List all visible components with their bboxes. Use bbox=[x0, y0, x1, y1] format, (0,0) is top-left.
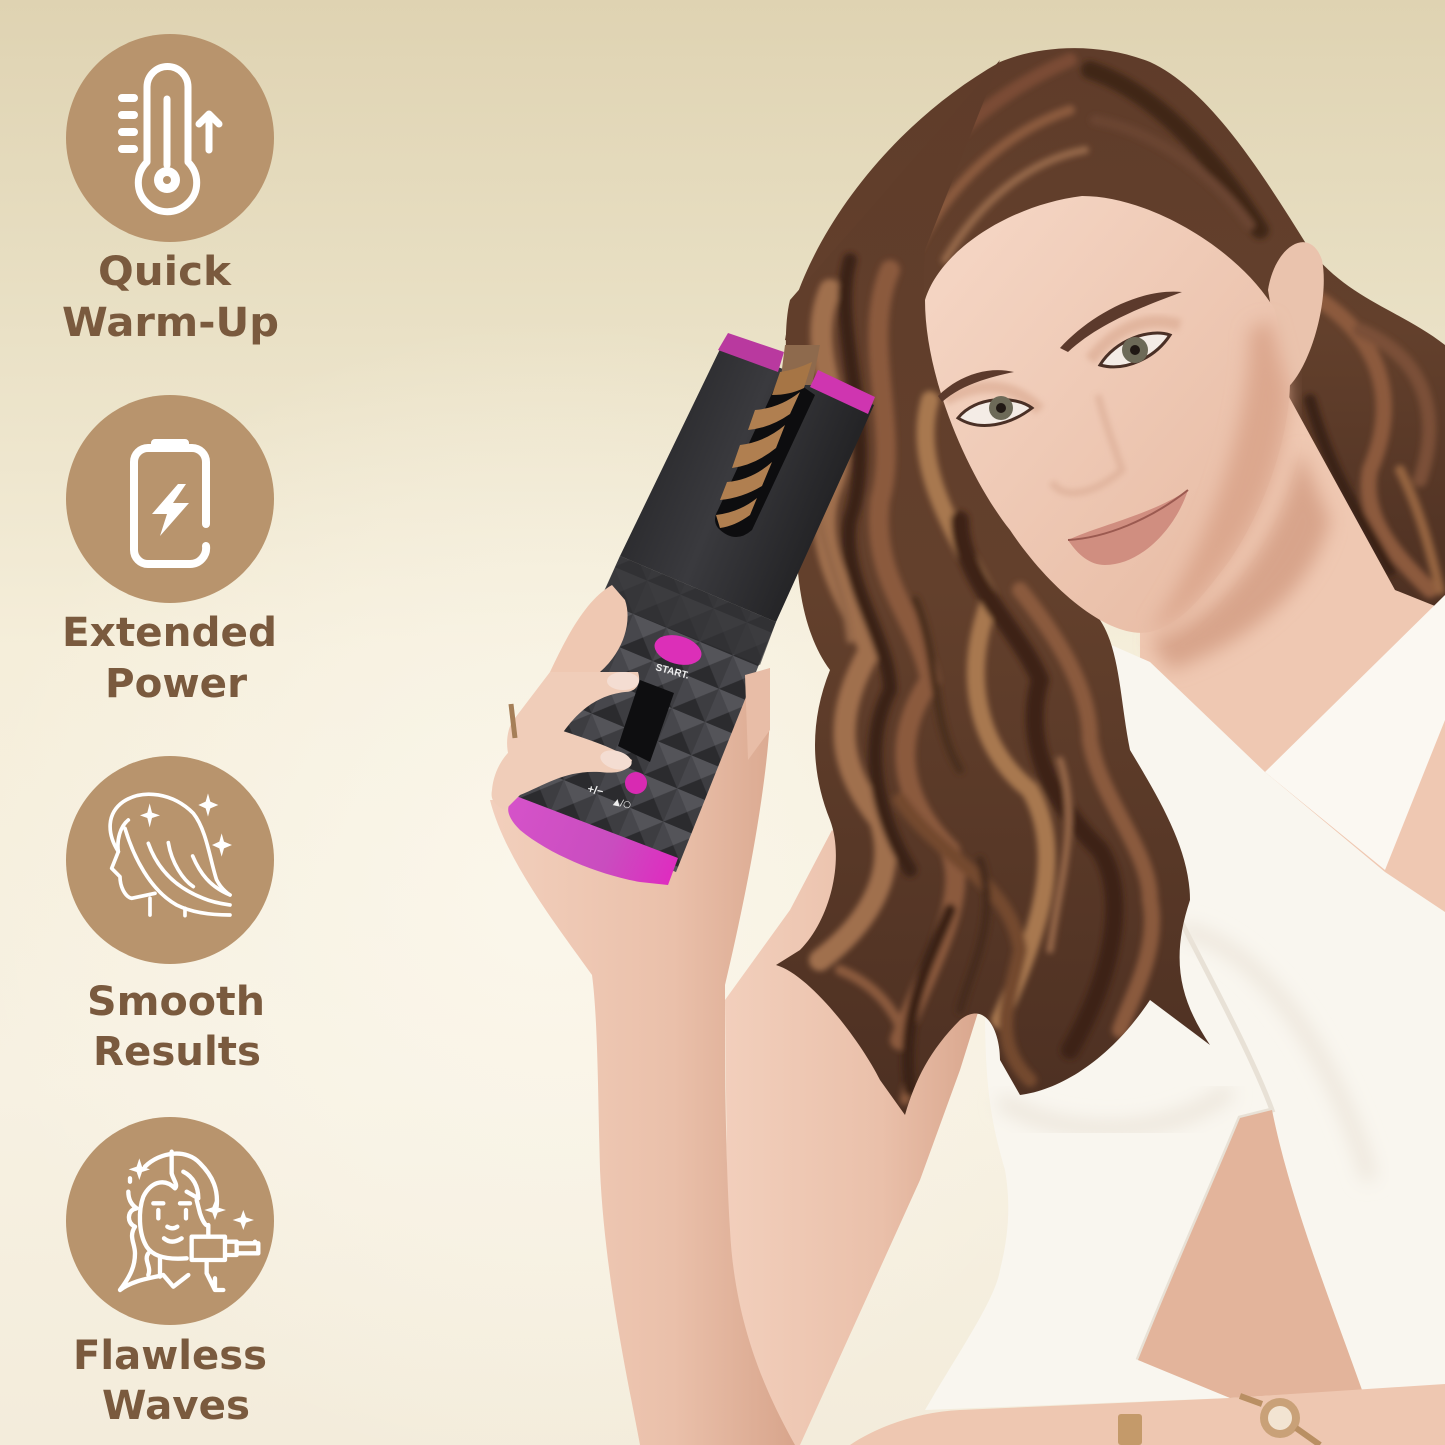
heading: smooth results: Results bbox=[93, 1029, 261, 1075]
icon: hair bbox=[66, 756, 274, 964]
heading: extended power: Extended bbox=[62, 610, 277, 656]
heading: quick warm-up: Quick bbox=[98, 249, 232, 295]
eyebrows bbox=[938, 370, 1014, 402]
heading: flawless waves: Waves bbox=[102, 1383, 250, 1429]
upper arm bbox=[725, 830, 985, 1445]
curler device: ▲/○ bbox=[612, 797, 632, 811]
panel: extended power bbox=[62, 395, 277, 707]
start button bbox=[651, 630, 705, 670]
heading: flawless waves: Flawless bbox=[73, 1333, 267, 1379]
hair slot bbox=[715, 345, 820, 537]
start label: START. bbox=[654, 662, 690, 682]
panel: quick warm-up bbox=[62, 34, 279, 346]
woman photo illustration bbox=[490, 48, 1445, 1445]
midriff bbox=[1138, 1110, 1362, 1398]
nose shadow bbox=[1052, 395, 1122, 493]
icon: battery bbox=[66, 395, 274, 603]
eye shadows bbox=[945, 322, 1180, 410]
heading: quick warm-up: Warm-Up bbox=[62, 300, 279, 346]
forearm and palm bbox=[490, 668, 795, 1445]
display screen bbox=[618, 680, 674, 762]
pink base bbox=[508, 796, 678, 885]
panel: smooth results bbox=[66, 756, 274, 1075]
back hair bbox=[785, 48, 1445, 612]
heading: smooth results: Smooth bbox=[87, 979, 265, 1025]
front hair mass bbox=[776, 60, 1210, 1115]
lips bbox=[1068, 490, 1188, 565]
barrel bbox=[620, 345, 874, 622]
fingers bbox=[492, 585, 770, 810]
curler device bbox=[508, 333, 875, 885]
white dress bbox=[925, 595, 1445, 1410]
icon: woman with curler bbox=[66, 1117, 274, 1325]
lower arm and jewellery bbox=[850, 1384, 1445, 1445]
neck and chest bbox=[1140, 395, 1445, 920]
power button bbox=[625, 772, 647, 794]
pink caps bbox=[718, 333, 784, 372]
ear bbox=[1268, 242, 1324, 390]
face bbox=[925, 196, 1324, 633]
lower patterned body bbox=[510, 556, 776, 872]
heading: extended power: Power bbox=[105, 661, 247, 707]
panel: flawless waves bbox=[66, 1117, 274, 1429]
control labels: +/− bbox=[586, 783, 604, 798]
eyes bbox=[958, 400, 1032, 425]
icon: thermometer bbox=[66, 34, 274, 242]
